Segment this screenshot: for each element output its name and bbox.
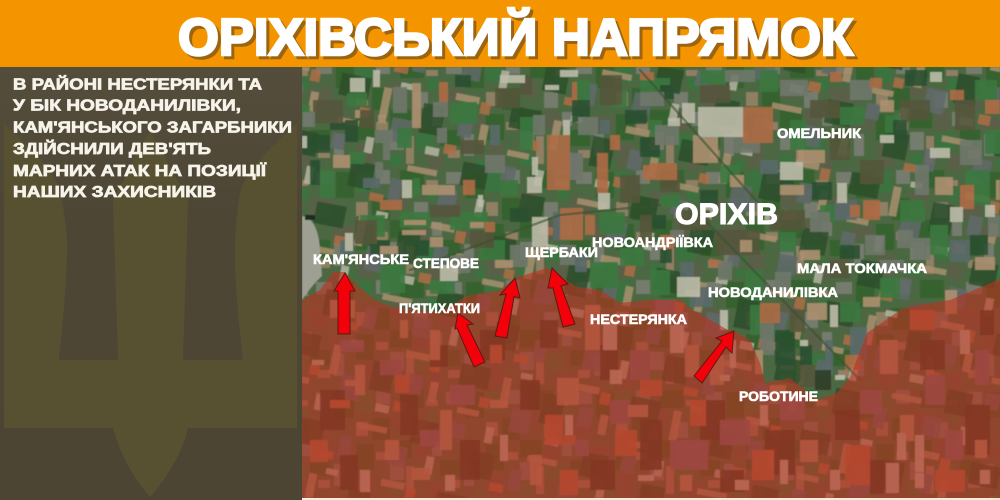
map label: Stepove: СТЕПОВЕ <box>413 255 479 271</box>
text block: summary: МАРНИХ АТАК НА ПОЗИЦІЇ <box>13 163 267 180</box>
map label: Novoandriivka: НОВОАНДРІЇВКА <box>592 234 713 250</box>
icon: trident watermark <box>4 123 297 497</box>
arrow: west of Shcherbaky <box>495 278 520 338</box>
arrow: Kamianske <box>334 273 355 334</box>
text block: summary: НАШИХ ЗАХИСНИКІВ <box>13 184 216 201</box>
panel: left text panel with trident <box>0 67 302 500</box>
text block: summary: КАМ'ЯНСЬКОГО ЗАГАРБНИКИ <box>13 120 292 136</box>
bottom strip <box>302 498 1000 500</box>
text block: summary: У БІК НОВОДАНИЛІВКИ, <box>13 98 241 114</box>
text block: summary: В РАЙОНІ НЕСТЕРЯНКИ ТА <box>13 76 262 94</box>
panel: map <box>302 67 1000 498</box>
map label: Nesterianka: НЕСТЕРЯНКА <box>590 311 687 327</box>
map label: Novodanylivka: НОВОДАНИЛІВКА <box>708 284 838 300</box>
arrow: Novodanylivka <box>694 331 734 383</box>
header band <box>0 0 1000 67</box>
title shadow: ОРІХІВСЬКИЙ НАПРЯМОК <box>181 11 856 70</box>
title: ОРІХІВСЬКИЙ НАПРЯМОК <box>178 8 853 67</box>
reservoir edge <box>302 216 322 300</box>
arrow: Shcherbaky <box>548 268 575 327</box>
text block: summary: ЗДІЙСНИЛИ ДЕВ'ЯТЬ <box>13 140 211 158</box>
map label: Piatykhatky: П'ЯТИХАТКИ <box>399 300 480 316</box>
map label: Shcherbaky: ЩЕРБАКИ <box>525 244 598 260</box>
map label: Robotyne: РОБОТИНЕ <box>739 388 818 404</box>
map label: Orikhiv: ОРІХІВ <box>675 198 778 231</box>
arrow: Piatykhatky <box>455 313 485 367</box>
text block: summary <box>13 76 292 201</box>
occupied territory overlay <box>302 268 1000 498</box>
map label: Kamianske: КАМ'ЯНСЬКЕ <box>313 251 409 267</box>
map label: Mala Tokmachka: МАЛА ТОКМАЧКА <box>797 260 927 276</box>
roads and shelterbelts <box>410 70 860 380</box>
map label: Omelnyk: ОМЕЛЬНИК <box>777 125 861 141</box>
